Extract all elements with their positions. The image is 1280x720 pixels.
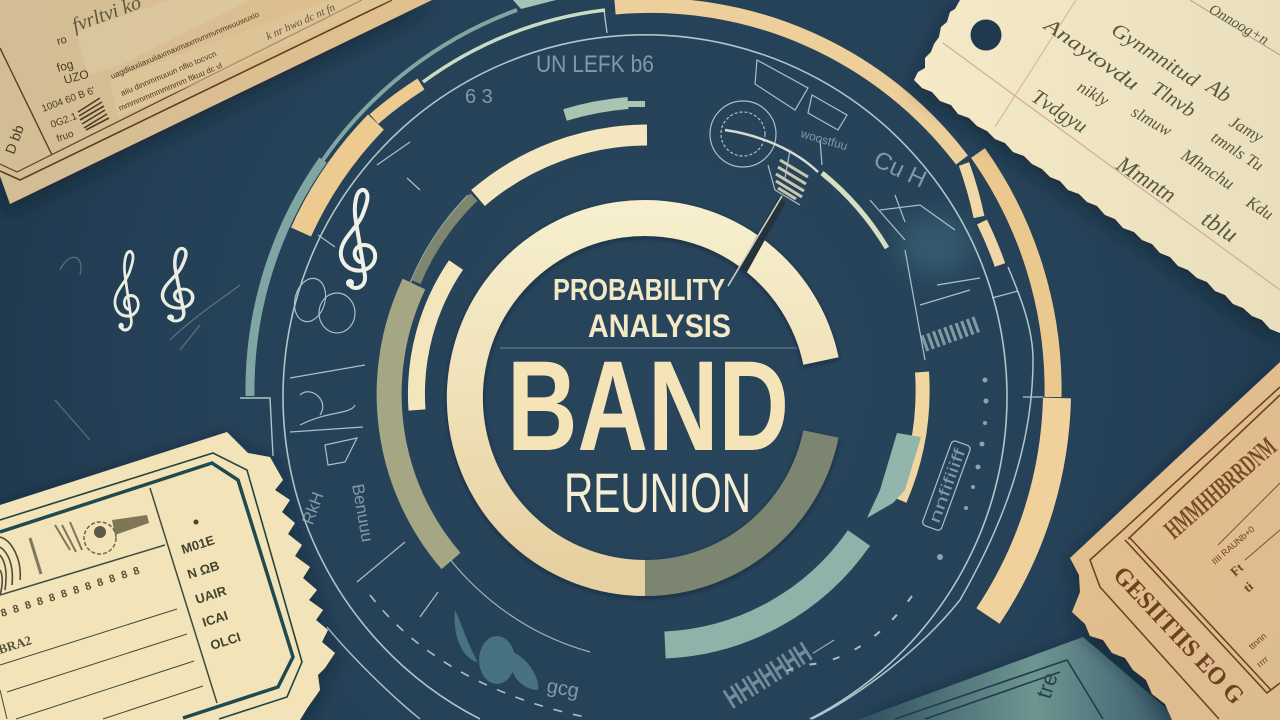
note paper bbox=[914, 0, 1280, 333]
chalk sketches left bbox=[290, 142, 438, 617]
arc: pale right needle arc bbox=[822, 173, 887, 248]
ring: olive segment bbox=[645, 434, 821, 578]
stamp bar bbox=[112, 515, 149, 535]
note handwriting: tmnls Tu bbox=[1208, 127, 1267, 175]
chalk script bottom: gcg bbox=[545, 675, 581, 703]
note handwriting: Ab bbox=[1201, 72, 1236, 108]
orange ticket paper bbox=[1070, 362, 1280, 720]
outer dial arcs bbox=[250, 0, 1057, 645]
ticket outer border bbox=[0, 453, 302, 719]
note handwriting: Jamy bbox=[1226, 112, 1267, 147]
chalk bordered label right: nnfifiiiff bbox=[927, 446, 969, 526]
ticket: bottom left bbox=[0, 432, 335, 720]
ticket: top left bbox=[0, 0, 432, 204]
thin guide circles bbox=[240, 10, 1043, 719]
arc: teal lower right bbox=[665, 538, 859, 645]
chalk sketches around the dial: IIIIIIIIII bbox=[918, 312, 983, 358]
ticket stub text: UAIR bbox=[193, 583, 229, 607]
faint left notes bbox=[55, 257, 240, 440]
note handwriting: Kdu bbox=[1242, 192, 1277, 224]
note handwriting: Onnoog+n bbox=[1206, 2, 1271, 48]
ticket small text: D bb bbox=[2, 123, 27, 156]
orange ticket small text: IIII RAUNb+0 bbox=[1210, 524, 1257, 567]
chalk hatch label bottom: HHHHHHH bbox=[719, 636, 818, 715]
title: reunion: REUNION bbox=[564, 461, 751, 524]
note handwriting: Mmntn bbox=[1111, 151, 1181, 208]
ticket small text: k nr hwo dc nt fn bbox=[264, 1, 338, 43]
ticket line box bbox=[110, 0, 392, 117]
chalk bordered label right bbox=[922, 440, 971, 531]
arc: green small top bbox=[565, 103, 645, 115]
ticket inner border bbox=[0, 463, 293, 718]
orange ticket stub text: GESIITIIS EO G bbox=[1108, 562, 1249, 710]
teal ticket border bbox=[895, 660, 1103, 719]
stamp hatch bbox=[55, 522, 82, 552]
arc: orange upper left bbox=[301, 84, 421, 232]
ticket small text: uagdiiaxiiaxuiiaxmaxmaxmvnmvnmwuuwuxio bbox=[109, 10, 261, 81]
cream ticket paper bbox=[0, 432, 335, 720]
ticket stub text: OLCI bbox=[208, 629, 243, 653]
title: probability: PROBABILITY bbox=[553, 272, 725, 307]
arc: olive lower left bbox=[389, 284, 451, 561]
ticket small text: UZO bbox=[62, 67, 90, 87]
ticket: bottom right bbox=[1070, 362, 1280, 720]
chalk dot column bbox=[937, 378, 988, 560]
arc: light thin top bbox=[423, 10, 605, 82]
note handwriting: tblu bbox=[1197, 206, 1242, 248]
stamp center bbox=[94, 526, 106, 538]
ticket dotted number row: 888888888888 bbox=[0, 563, 147, 620]
needle bbox=[725, 130, 818, 286]
chalk label top: UN LEFK b6 bbox=[536, 51, 654, 78]
wedge: teal right bbox=[867, 433, 921, 518]
ticket borders bbox=[0, 0, 392, 180]
orange ticket small text: ti bbox=[1240, 578, 1256, 595]
ticket stub text: ICAI bbox=[200, 608, 230, 630]
chalk marks top left: 6 3 bbox=[465, 86, 493, 108]
note hole bbox=[970, 20, 1002, 50]
teal ticket paper bbox=[857, 637, 1180, 720]
note ruled lines bbox=[943, 0, 1280, 290]
chalk sketches around the dial bbox=[55, 51, 988, 718]
ticket stub text: M01E bbox=[179, 532, 217, 557]
chalk sketches around the dial: Cu H bbox=[869, 146, 930, 194]
orange ticket inner lines bbox=[1218, 483, 1280, 560]
needle shaft bbox=[743, 200, 782, 270]
ticket: bottom teal bbox=[857, 637, 1180, 720]
title divider bbox=[500, 347, 797, 349]
arc: cream inner left bbox=[416, 265, 456, 410]
note handwriting: Gynmnitud bbox=[1107, 19, 1204, 92]
note handwriting: Anaytovdu bbox=[1038, 13, 1143, 95]
arc: olive thin upper left bbox=[416, 197, 474, 282]
ticket stub text: N ΩB bbox=[185, 558, 221, 582]
ticket dividers and rules bbox=[0, 488, 217, 719]
central donut bbox=[465, 218, 821, 578]
ticket paper bbox=[0, 0, 432, 204]
ticket small text: ro bbox=[56, 34, 68, 48]
ticket small text: fruo bbox=[55, 128, 76, 145]
needle coil bbox=[776, 160, 808, 199]
needle highlight bbox=[728, 196, 782, 286]
title block bbox=[500, 272, 797, 524]
ticket small text bbox=[2, 0, 338, 156]
title: analysis: ANALYSIS bbox=[588, 308, 731, 344]
icon: small treble clef right bbox=[162, 248, 193, 321]
orange ticket small text: rrrr bbox=[1255, 654, 1270, 670]
chalk scribble labels right: woostfuu bbox=[798, 126, 849, 153]
arc: orange right outer bbox=[978, 153, 1053, 397]
teal ticket text: tre bbox=[1031, 669, 1063, 702]
chalk notes: RkH bbox=[298, 489, 328, 527]
ticket small text: 1004 60 B 6' bbox=[40, 85, 97, 115]
ticket stamp bbox=[55, 515, 149, 554]
chalk text left: Benuuu bbox=[348, 482, 377, 543]
sketch of blue-green blobs at bottom bbox=[455, 610, 538, 690]
tab: teal top bbox=[513, 0, 556, 9]
orange ticket small text bbox=[1210, 524, 1270, 670]
title: band: BAND bbox=[507, 335, 789, 478]
orange ticket small text: ttnnn bbox=[1247, 631, 1268, 652]
ticket small text: mmmmmmmmmmm ftkuu dc vl bbox=[117, 61, 224, 113]
chalk glow patch bbox=[897, 215, 973, 275]
ticket small text: fog bbox=[55, 57, 75, 75]
note handwriting: Tvdgyu bbox=[1027, 84, 1092, 138]
ticket stub text bbox=[179, 520, 243, 653]
ring: cream segment bbox=[465, 218, 821, 578]
arc: teal outer left bbox=[250, 10, 517, 396]
stamp circle bbox=[84, 522, 116, 554]
note handwriting: Mhnchu bbox=[1177, 144, 1238, 193]
orange ticket borders bbox=[1090, 387, 1280, 719]
dashed track bbox=[785, 596, 912, 672]
ticket barcode bbox=[78, 98, 109, 130]
note handwriting bbox=[1027, 2, 1277, 248]
needle blade bbox=[725, 130, 818, 172]
ticket small text: 0G2.1 bbox=[49, 111, 79, 131]
ticket small text: aiiu dinnmmuuun nflio tocvcn bbox=[119, 49, 218, 98]
arc: orange short segments bbox=[964, 164, 1000, 265]
arc: orange top bbox=[615, 5, 962, 160]
ticket swirl bbox=[0, 537, 41, 595]
icon: small treble clef left bbox=[115, 251, 138, 330]
ticket light panel bbox=[76, 0, 250, 75]
arc: orange right wide bbox=[988, 398, 1057, 616]
icon: large treble clef bbox=[341, 190, 375, 288]
note handwriting: nikly bbox=[1074, 77, 1113, 110]
note handwriting: Tlnvb bbox=[1147, 76, 1200, 122]
chalk gauge sketch bbox=[710, 60, 980, 360]
torn handwritten note bbox=[914, 0, 1280, 333]
note handwriting: slmuw bbox=[1128, 102, 1176, 141]
orange ticket small text: Ft bbox=[1227, 559, 1247, 579]
arc: cream upper mid bbox=[478, 135, 647, 198]
arc: orange inner right bbox=[900, 372, 923, 500]
